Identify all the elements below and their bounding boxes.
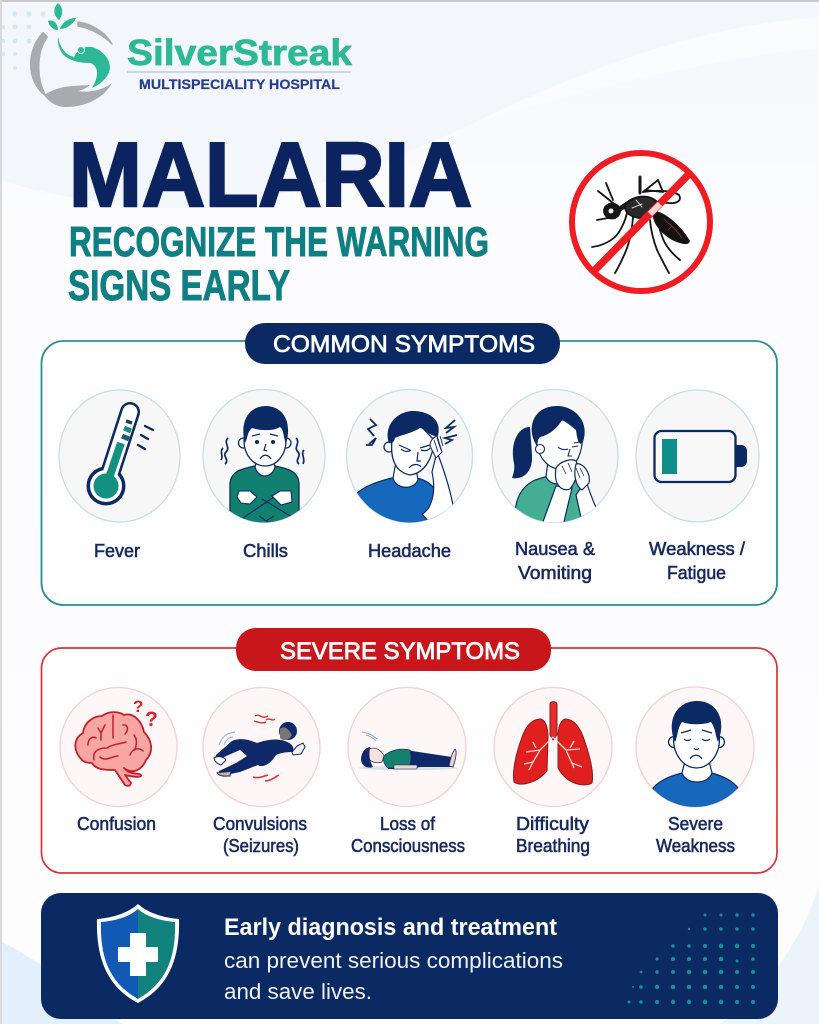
question marks: ?: [133, 697, 143, 716]
icon: severe weakness person: [636, 687, 754, 812]
label: weakness fatigue: Weakness /: [649, 539, 745, 559]
label: convulsions: Convulsions: [213, 814, 307, 834]
label: convulsions: [213, 814, 307, 856]
label: severe weakness: Weakness: [656, 836, 735, 856]
label: difficulty breathing: Breathing: [516, 836, 590, 856]
icon: nausea person: [492, 390, 618, 530]
label: confusion: Confusion: [77, 814, 156, 834]
label: weakness fatigue: Fatigue: [667, 563, 726, 583]
label: weakness fatigue: [649, 539, 745, 583]
icon: no mosquito: [572, 153, 710, 291]
label: nausea and vomiting: Nausea &: [515, 539, 595, 559]
label: nausea and vomiting: [515, 539, 595, 583]
logo subtitle: MULTISPECIALITY HOSPITAL: [139, 77, 340, 92]
icon: convulsions person: [203, 688, 320, 806]
label: nausea and vomiting: Vomiting: [518, 563, 592, 583]
label: severe weakness: Severe: [668, 814, 723, 834]
label: difficulty breathing: [516, 814, 590, 856]
question marks: [133, 697, 158, 731]
panel: severe symptoms: [42, 628, 777, 873]
heading: severe symptoms: SEVERE SYMPTOMS: [280, 638, 520, 665]
logo name: SilverStreak: [127, 32, 353, 73]
icon: weakness battery: [636, 390, 759, 522]
label: loss of consciousness: [351, 814, 465, 856]
label: difficulty breathing: Difficulty: [516, 814, 589, 834]
icon: loss of consciousness person: [348, 688, 466, 806]
label: chills: Chills: [243, 541, 288, 561]
callout text: can prevent serious complications: [224, 948, 563, 973]
heading: severe symptoms: [236, 628, 551, 671]
icon: lungs: [494, 688, 612, 806]
icon: confusion brain: [60, 688, 177, 806]
logo emblem: [31, 3, 112, 107]
label: fever: Fever: [94, 541, 140, 561]
title: MALARIA: [69, 125, 472, 226]
callout text: and save lives.: [224, 979, 372, 1004]
callout text: Early diagnosis and treatment: [224, 914, 557, 941]
question marks: ?: [145, 708, 158, 731]
panel: common symptoms: [42, 323, 777, 605]
subtitle: RECOGNIZE THE WARNING: [69, 218, 489, 265]
icon: headache person: [346, 390, 472, 530]
heading: common symptoms: COMMON SYMPTOMS: [273, 331, 535, 358]
label: headache: Headache: [368, 541, 451, 561]
logo: [31, 3, 353, 107]
icon: chills person: [203, 390, 325, 530]
label: convulsions: (Seizures): [223, 836, 299, 856]
label: severe weakness: [656, 814, 735, 856]
label: loss of consciousness: Consciousness: [351, 836, 465, 856]
callout text: [224, 914, 563, 1004]
icon: fever thermometer: [59, 390, 180, 522]
subtitle: [68, 218, 489, 310]
label: loss of consciousness: Loss of: [380, 814, 436, 834]
subtitle: SIGNS EARLY: [68, 263, 290, 310]
decorative dot grid: [628, 913, 755, 1004]
mosquito: [592, 177, 689, 273]
icon: shield: [96, 904, 180, 1004]
callout banner: [41, 893, 778, 1019]
heading: common symptoms: [245, 323, 560, 364]
